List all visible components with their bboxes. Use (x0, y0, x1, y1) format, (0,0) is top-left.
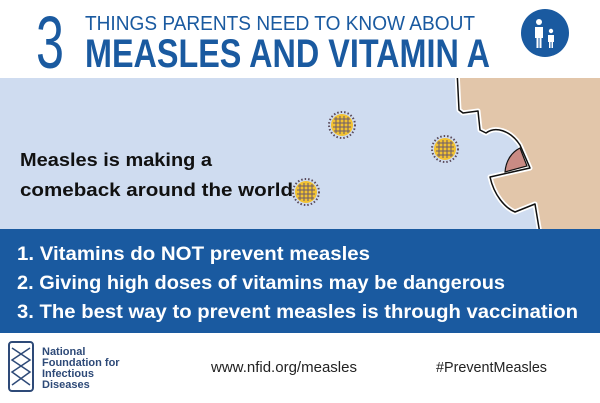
logo: NFID: Diseases (42, 379, 90, 391)
illustration panel (0, 78, 600, 229)
logo: NFID: Foundation for (42, 357, 120, 369)
logo: NFID: National (42, 346, 85, 358)
footer hashtag: #PreventMeasles (436, 359, 547, 376)
key points band (0, 229, 600, 333)
key points band: 3. The best way to prevent measles is through vaccination (17, 302, 578, 323)
footer url: www.nfid.org/measles (210, 359, 357, 376)
logo: NFID: Infectious (42, 368, 94, 380)
icon: parent and child (521, 9, 569, 57)
key points band: 2. Giving high doses of vitamins may be dangerous (17, 273, 505, 294)
panel text line 2: comeback around the world (20, 180, 293, 200)
virus 1 (329, 112, 355, 138)
face (457, 70, 600, 240)
title: THINGS PARENTS NEED TO KNOW ABOUT (85, 13, 475, 35)
virus 3 (293, 179, 319, 205)
virus 2 (432, 136, 458, 162)
title (36, 1, 490, 84)
title: MEASLES AND VITAMIN A (85, 32, 490, 76)
logo: NFID (9, 342, 120, 391)
tongue (505, 148, 527, 172)
title: 3 (36, 1, 64, 84)
key points band: 1. Vitamins do NOT prevent measles (17, 244, 370, 265)
panel text: Measles is making a (20, 150, 213, 170)
